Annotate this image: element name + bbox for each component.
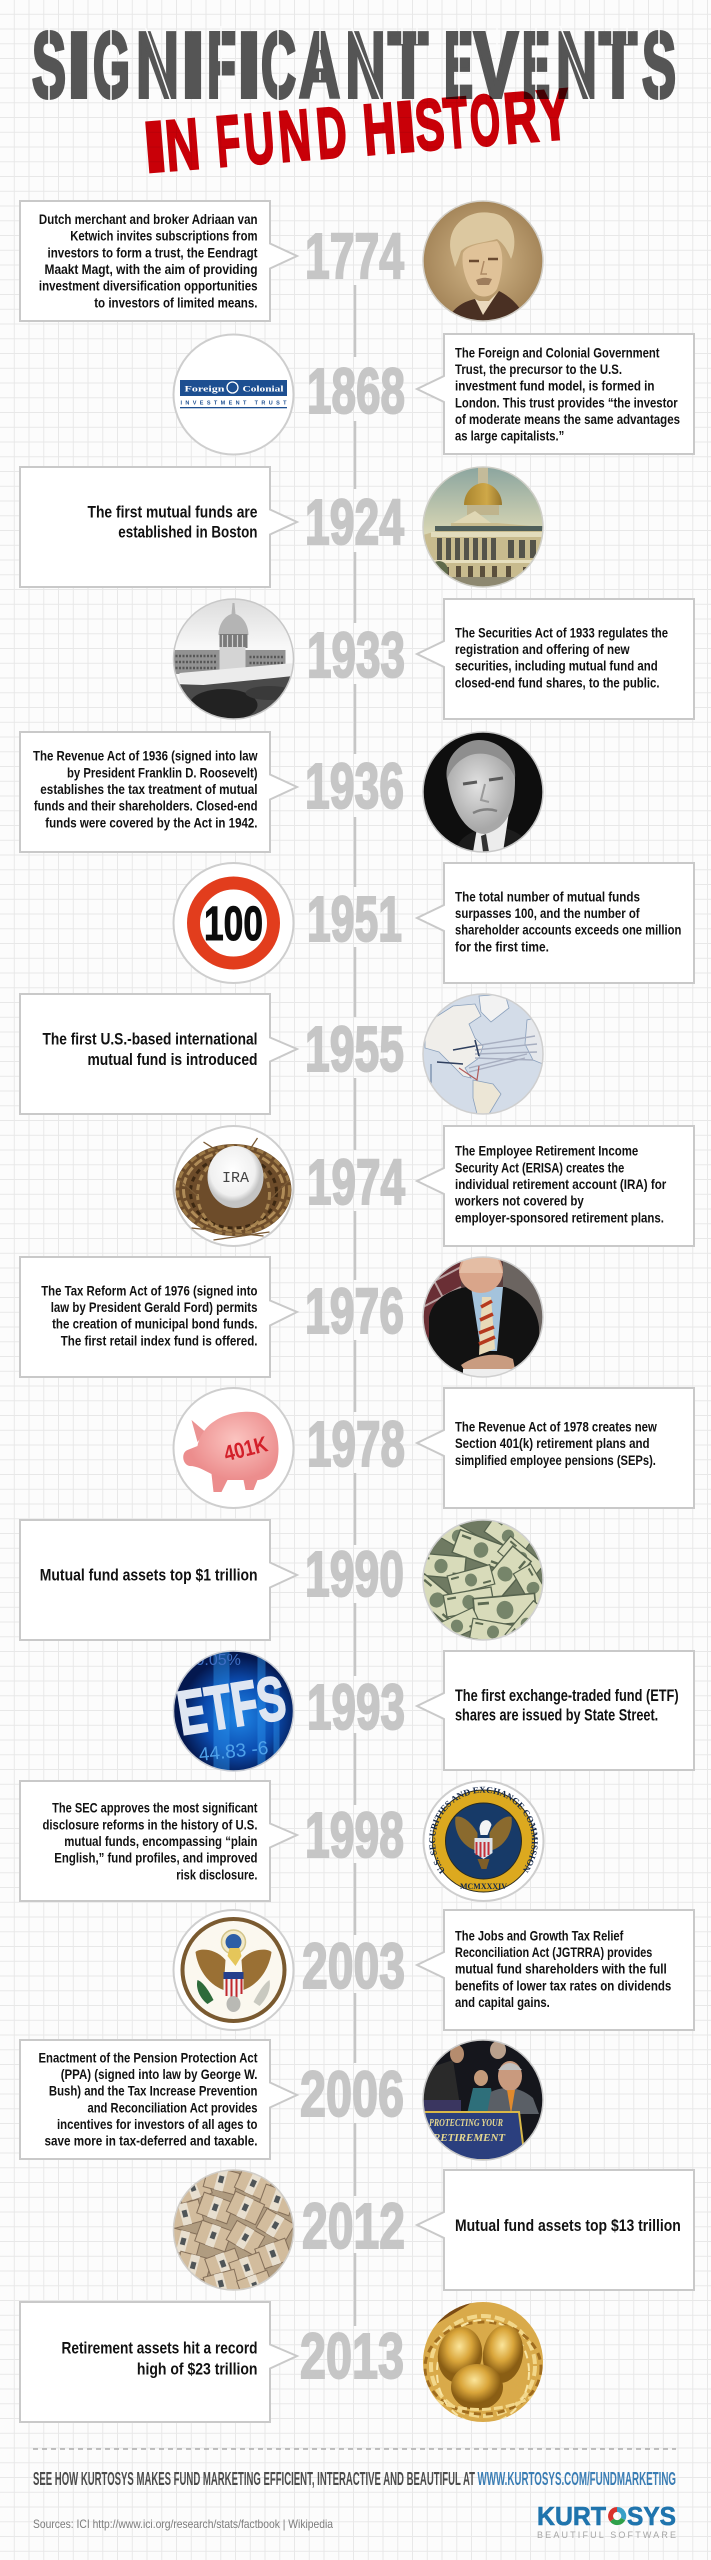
- callout: 1951: [417, 863, 694, 983]
- callout: 1924: The first mutual funds are: [88, 502, 258, 521]
- title: significant events: G: [93, 13, 130, 117]
- subtitle: in fund history: R: [501, 77, 541, 159]
- footer divider: [33, 2448, 676, 2450]
- callout: 1998: disclosure reforms in the history of U.S.: [42, 1816, 258, 1832]
- callout: 1936: by President Franklin D. Roosevelt): [67, 764, 258, 780]
- event 1951: [174, 863, 694, 983]
- subtitle: in fund history: D: [313, 92, 350, 175]
- subtitle: in fund history: H: [360, 88, 398, 171]
- event 1976: [20, 1249, 543, 1377]
- title: significant events: I: [67, 13, 91, 117]
- image: bush signing: [419, 2040, 543, 2160]
- title: significant events: E: [522, 13, 550, 117]
- title: significant events: N: [136, 13, 179, 117]
- subtitle: in fund history: [140, 74, 573, 189]
- image: stacks of cash: [172, 2169, 294, 2291]
- callout: 1990: Mutual fund assets top $1 trillion: [40, 1565, 258, 1584]
- event 2003: [174, 1910, 694, 2030]
- year 1978: 1978: [307, 1408, 405, 1480]
- image: sec seal: [422, 1780, 544, 1902]
- year 2012: 2012: [302, 2190, 405, 2262]
- title: significant events: [32, 13, 676, 117]
- callout: 1998: [20, 1781, 297, 1901]
- title: significant events: S: [32, 13, 66, 117]
- callout: 1936: [20, 732, 297, 852]
- callout: 1774: Ketwich invites subscriptions from: [70, 228, 258, 244]
- image: massachusetts state house: [423, 467, 543, 587]
- event 1974: [174, 1126, 694, 1246]
- callout: 1976: The Tax Reform Act of 1976 (signed into: [41, 1282, 258, 1298]
- image: etfs: 44.83 -6: [198, 1738, 269, 1766]
- year 1993: 1993: [307, 1671, 405, 1743]
- callout: 1951: for the first time.: [455, 938, 549, 954]
- year 1936: 1936: [305, 750, 404, 822]
- image: golden eggs in nest: [423, 2302, 543, 2424]
- event 1924: [20, 467, 543, 587]
- subtitle: in fund history: F: [213, 101, 243, 183]
- callout: 1933: closed-end fund shares, to the public.: [455, 674, 660, 690]
- subtitle: in fund history: O: [467, 80, 503, 162]
- callout: 1976: The first retail index fund is offered.: [61, 1332, 258, 1348]
- callout: 1978: Section 401(k) retirement plans and: [455, 1435, 650, 1451]
- title: significant events: S: [642, 13, 676, 117]
- callout: 1774: [20, 201, 297, 321]
- image: foreign and colonial logo: Foreign: [184, 384, 225, 394]
- logo: kurtosys: BEAUTIFUL SOFTWARE: [537, 2530, 676, 2540]
- callout: 1998: risk disclosure.: [176, 1866, 258, 1882]
- image: us capitol: [174, 599, 294, 721]
- callout: 1978: The Revenue Act of 1978 creates new: [455, 1418, 657, 1434]
- year 1868: 1868: [307, 355, 405, 427]
- callout: 2013: Retirement assets hit a record: [62, 2339, 258, 2358]
- callout: 2003: mutual fund shareholders with the full: [455, 1961, 667, 1977]
- event 1955: [20, 994, 543, 1114]
- title: significant events: T: [388, 13, 428, 117]
- callout: 1978: simplified employee pensions (SEPs).: [455, 1452, 656, 1468]
- year 1924: 1924: [305, 486, 404, 558]
- callout: 1978: [417, 1388, 694, 1508]
- callout: 1998: mutual funds, encompassing “plain: [64, 1833, 258, 1849]
- event 1993: [173, 1651, 694, 1771]
- callout: 2006: incentives for investors of all ages to: [57, 2116, 258, 2132]
- callout: 1933: securities, including mutual fund and: [455, 658, 658, 674]
- image: foreign and colonial logo: [174, 334, 294, 454]
- year 1774: 1774: [305, 220, 404, 292]
- subtitle: in fund history: I: [140, 107, 170, 189]
- callout: 1955: mutual fund is introduced: [88, 1050, 258, 1069]
- callout: 2013: [20, 2302, 297, 2422]
- callout: 1998: The SEC approves the most significant: [52, 1800, 258, 1816]
- event 1936: [20, 732, 543, 852]
- logo: kurtosys: SYS: [627, 2501, 676, 2531]
- title: significant events: V: [474, 13, 518, 117]
- image: etfs: 0.05%: [196, 1652, 241, 1669]
- title: significant events: T: [599, 13, 637, 117]
- image: ford signing: [423, 1249, 543, 1377]
- subtitle: in fund history: U: [241, 98, 277, 180]
- callout: 1924: [20, 467, 297, 587]
- year 1933: 1933: [307, 619, 405, 691]
- callout: 1974: The Employee Retirement Income: [455, 1143, 638, 1159]
- callout: 1936: establishes the tax treatment of mutual: [40, 781, 258, 797]
- event 1990: [20, 1515, 553, 1647]
- subtitle: in fund history: Y: [535, 74, 573, 157]
- image: etfs: ETFS: [173, 1664, 290, 1749]
- year 2006: 2006: [300, 2058, 404, 2130]
- callout: 2006: Bush) and the Tax Increase Prevention: [49, 2083, 258, 2099]
- callout: 1955: The first U.S.-based international: [42, 1030, 258, 1049]
- sources: Sources: ICI http://www.ici.org/research/stats/factbook | Wikipedia: [33, 2517, 333, 2531]
- callout: 2006: (PPA) (signed into law by George W.: [61, 2066, 258, 2082]
- title: significant events: A: [299, 13, 340, 117]
- callout: 2003: The Jobs and Growth Tax Relief: [455, 1927, 624, 1943]
- year 1974: 1974: [307, 1146, 405, 1218]
- callout: 2006: save more in tax-deferred and taxable.: [44, 2133, 258, 2149]
- event 1998: [19, 1780, 544, 1902]
- callout: 1774: to investors of limited means.: [94, 294, 258, 310]
- image: sec seal: U.S. SECURITIES AND EXCHANGE COMMISSION: [429, 1786, 538, 1874]
- image: world map: [423, 994, 543, 1114]
- image: great seal: [174, 1910, 294, 2030]
- callout: 1868: [417, 334, 694, 454]
- callout: 2003: and capital gains.: [455, 1994, 550, 2010]
- image: bush signing: PROTECTING YOUR: [429, 2117, 503, 2129]
- year 1990: 1990: [305, 1538, 404, 1610]
- event 2013: [20, 2302, 543, 2424]
- title: significant events: C: [261, 13, 296, 117]
- callout: 1955: [20, 994, 297, 1114]
- callout: 1951: The total number of mutual funds: [455, 888, 640, 904]
- callout: 2013: high of $23 trillion: [137, 2359, 258, 2378]
- image: sepia portrait: [423, 201, 543, 321]
- event 1933: [174, 599, 694, 721]
- image: 401k piggy bank: [174, 1388, 294, 1508]
- callout: 1936: funds were covered by the Act in 1942.: [45, 814, 258, 830]
- callout: 1868: The Foreign and Colonial Government: [455, 344, 660, 360]
- image: ira nest egg: IRA: [222, 1170, 249, 1187]
- callout: 2003: Reconciliation Act (JGTRRA) provides: [455, 1944, 652, 1960]
- callout: 1774: Dutch merchant and broker Adriaan van: [39, 211, 258, 227]
- callout: 1774: Maakt Magt, with the aim of providing: [44, 261, 258, 277]
- image: foreign and colonial logo: INVESTMENT TRUST: [180, 400, 287, 406]
- callout: 1924: established in Boston: [118, 523, 258, 542]
- callout: 1774: investment diversification opportunities: [39, 278, 258, 294]
- image: ira nest egg: [174, 1126, 294, 1246]
- title: significant events: I: [237, 13, 261, 117]
- year 1951: 1951: [307, 883, 402, 955]
- image: pile of dollar bills: [422, 1519, 544, 1641]
- image: speed limit 100 sign: [174, 863, 294, 983]
- event 2012: [172, 2169, 695, 2291]
- image: bush signing: RETIREMENT: [432, 2132, 506, 2144]
- title: significant events: I: [181, 13, 205, 117]
- event 1978: [174, 1388, 694, 1508]
- callout: 2003: benefits of lower tax rates on dividends: [455, 1977, 671, 1993]
- title: significant events: E: [444, 13, 473, 117]
- callout: 1974: employer-sponsored retirement plans.: [455, 1209, 664, 1225]
- event 1774: [20, 201, 543, 321]
- callout: 2003: [417, 1910, 694, 2030]
- callout: 1976: the creation of municipal bond funds.: [52, 1316, 258, 1332]
- callout: 1774: investors to form a trust, the Eendragt: [48, 244, 258, 260]
- title: significant events: N: [346, 13, 386, 117]
- callout: 1936: funds and their shareholders. Closed-end: [34, 798, 258, 814]
- callout: 1974: workers not covered by: [454, 1193, 584, 1209]
- year 2013: 2013: [300, 2320, 404, 2392]
- callout: 1933: [417, 599, 694, 719]
- callout: 2006: [20, 2040, 297, 2159]
- event 2006: [20, 2040, 543, 2160]
- callout: 1974: individual retirement account (IRA) for: [455, 1176, 667, 1192]
- image: roosevelt portrait: [423, 732, 543, 852]
- callout: 1933: registration and offering of new: [455, 641, 630, 657]
- callout: 1990: [20, 1520, 297, 1640]
- callout: 1951: surpasses 100, and the number of: [455, 905, 640, 921]
- subtitle: in fund history: S: [412, 85, 447, 167]
- callout: 1868: as large capitalists.”: [455, 428, 564, 444]
- year 1976: 1976: [305, 1275, 404, 1347]
- callout: 1998: English,” fund profiles, and improved: [54, 1850, 258, 1866]
- subtitle: in fund history: I: [392, 87, 419, 168]
- title: significant events: F: [207, 13, 236, 117]
- subtitle: in fund history: N: [162, 104, 203, 187]
- callout: 1936: The Revenue Act of 1936 (signed into law: [33, 748, 258, 764]
- subtitle: in fund history: T: [441, 83, 471, 164]
- subtitle: in fund history: N: [275, 95, 314, 178]
- callout: 1974: Security Act (ERISA) creates the: [455, 1159, 624, 1175]
- callout: 1993: [417, 1651, 694, 1770]
- callout: 1974: [417, 1126, 694, 1246]
- title: significant events: N: [556, 13, 597, 117]
- logo: kurtosys: KURT: [537, 2501, 606, 2531]
- callout: 1976: [20, 1257, 297, 1377]
- logo: kurtosys: [537, 2501, 676, 2540]
- callout: 1976: law by President Gerald Ford) permits: [51, 1299, 258, 1315]
- callout: 2006: and Reconciliation Act provides: [88, 2099, 258, 2115]
- image: etfs: [173, 1651, 294, 1771]
- year 2003: 2003: [302, 1930, 405, 2002]
- icon: logo o: [611, 2509, 624, 2523]
- year 1955: 1955: [305, 1013, 404, 1085]
- image: speed limit 100 sign: 100: [204, 898, 263, 951]
- timeline spine: [354, 285, 356, 2326]
- callout: 2012: [417, 2170, 694, 2290]
- event 1868: [174, 334, 694, 454]
- year 1998: 1998: [305, 1799, 404, 1871]
- image: sec seal: MCMXXXIV: [460, 1882, 507, 1891]
- image: 401k piggy bank: 401K: [221, 1431, 270, 1466]
- image: foreign and colonial logo: Colonial: [242, 384, 284, 394]
- callout: 1868: investment fund model, is formed in: [455, 378, 654, 394]
- callout: 1868: Trust, the precursor to the U.S.: [455, 361, 622, 377]
- callout: 2006: Enactment of the Pension Protection Act: [38, 2049, 258, 2065]
